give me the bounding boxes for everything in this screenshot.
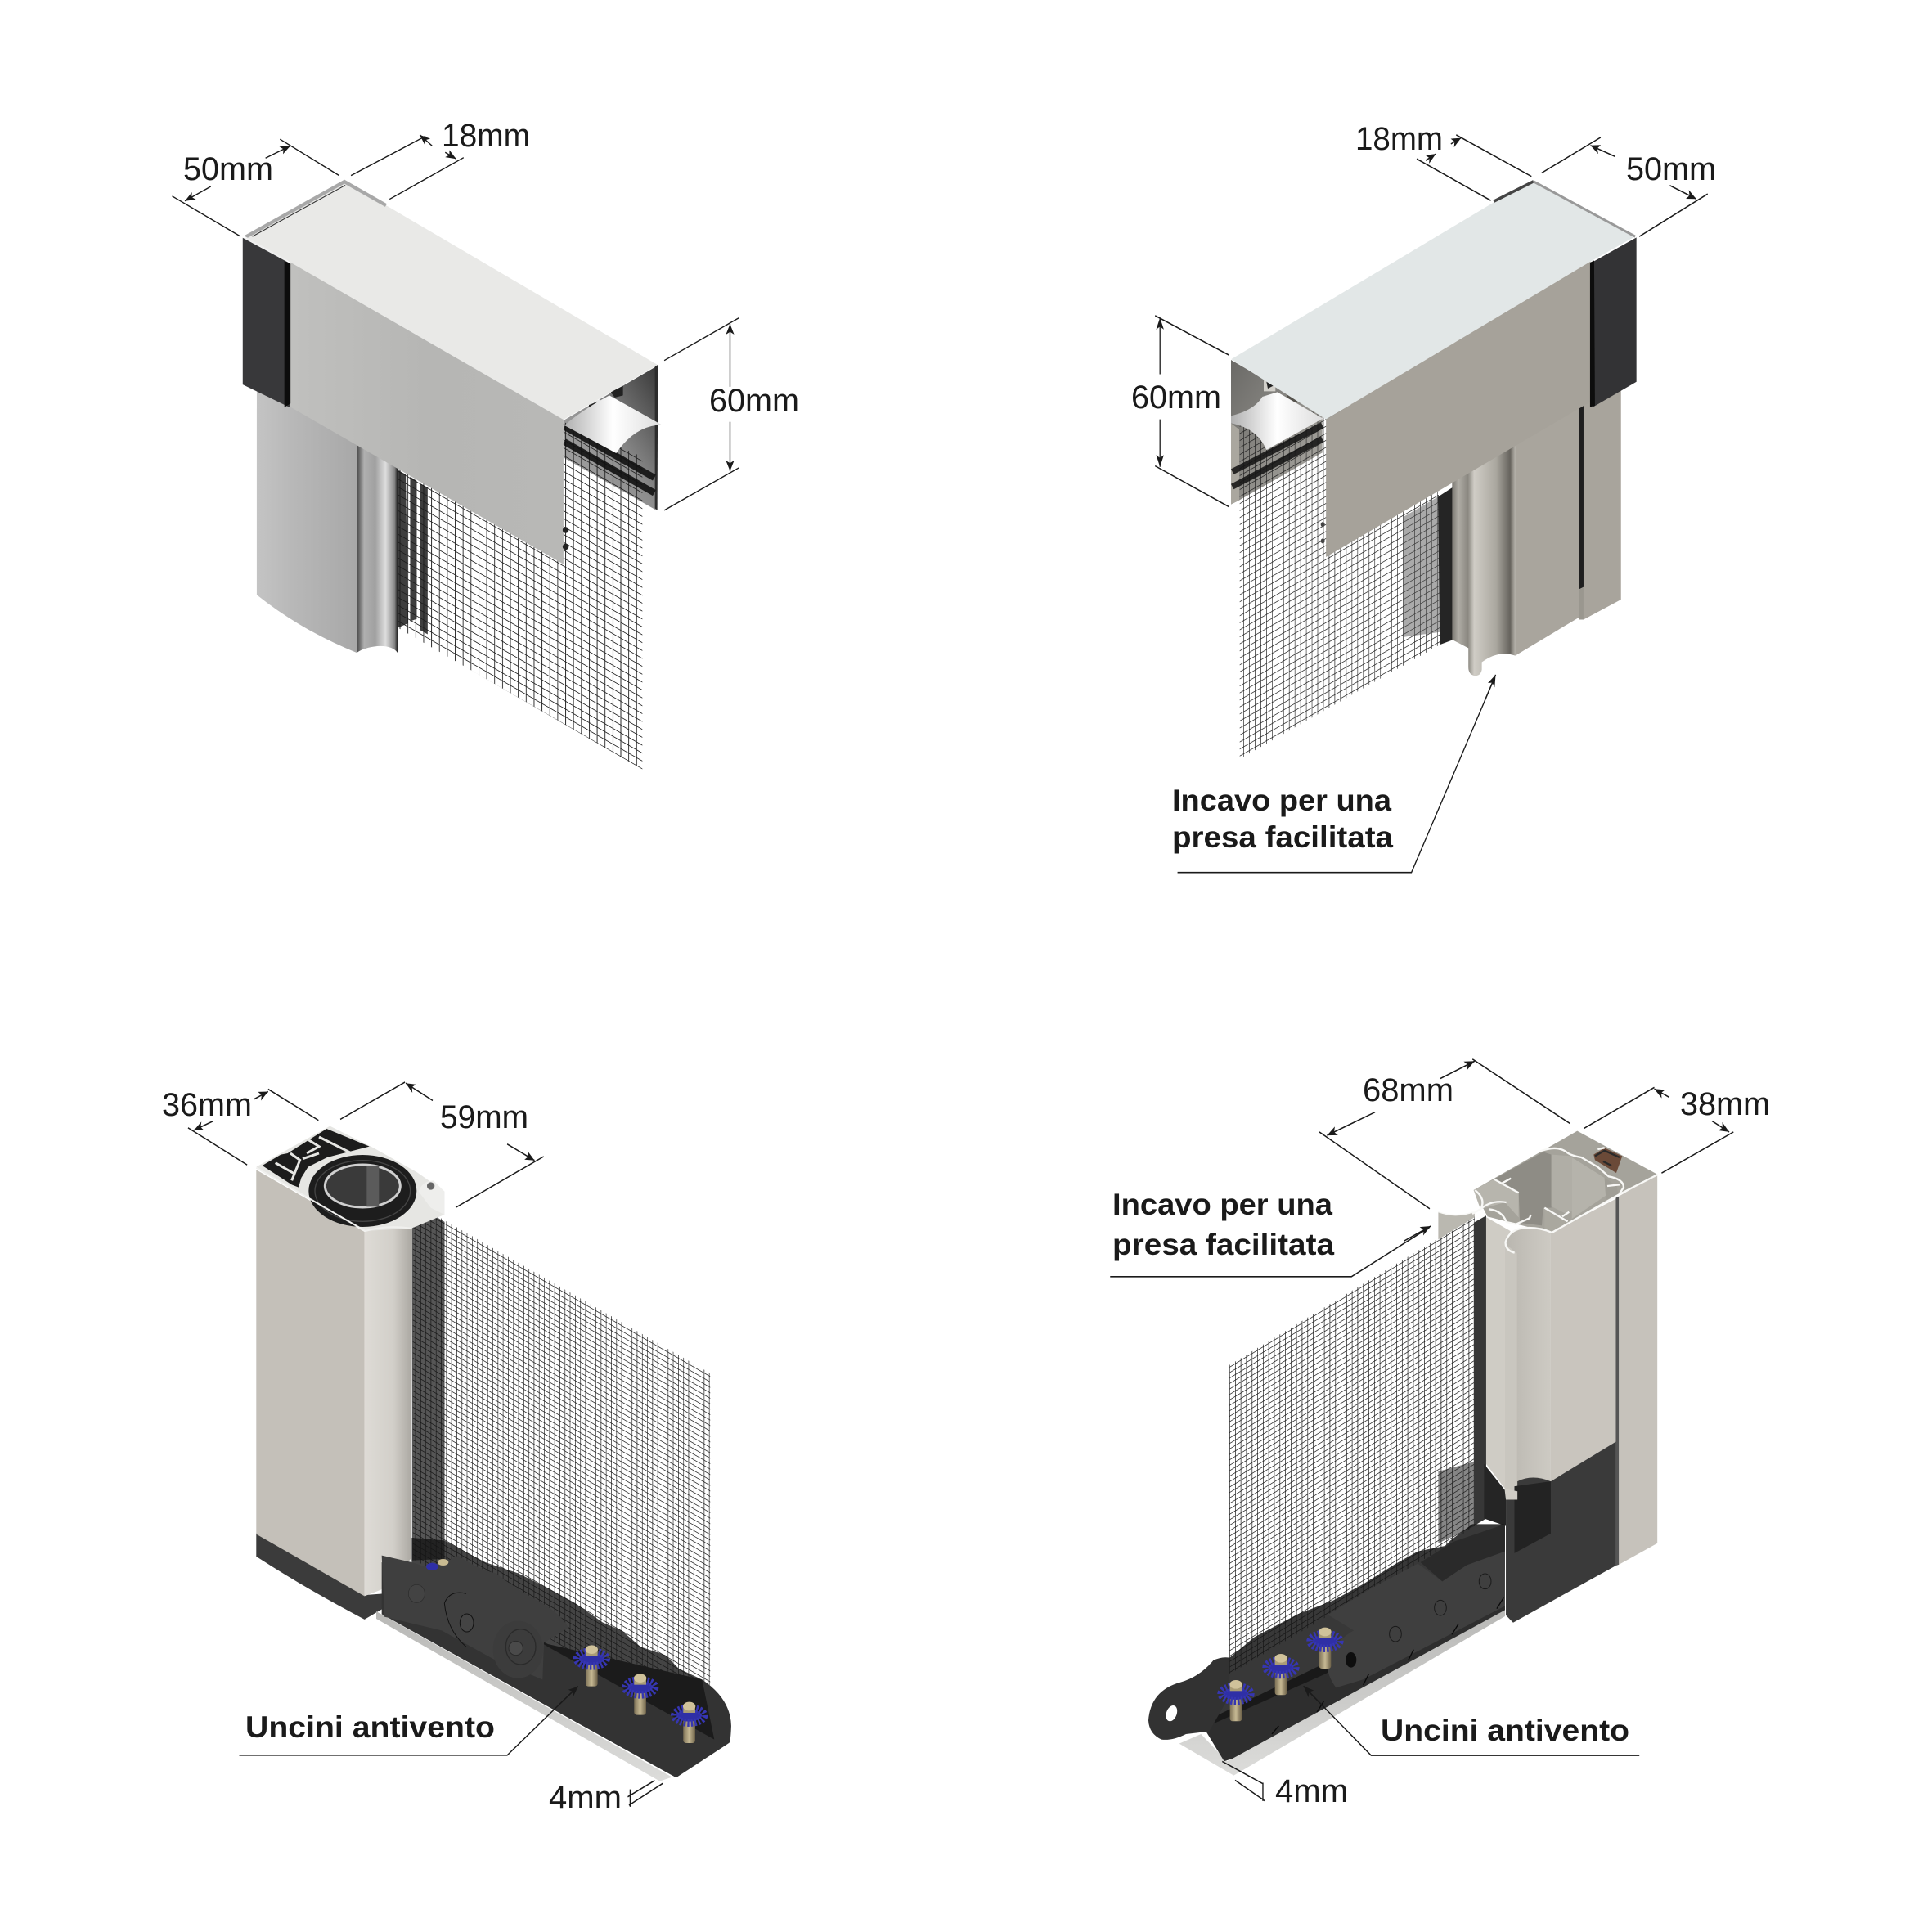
finger groove — [1452, 432, 1515, 676]
profile faces — [1486, 1174, 1657, 1566]
cassette drawing — [257, 378, 642, 770]
panel: top-right cassette profile — [1131, 121, 1716, 873]
label: 50mm: 50mm — [183, 151, 273, 187]
label: 60mm: 60mm — [1131, 380, 1221, 416]
dimension lines and leader — [188, 1082, 663, 1807]
bar drawing — [256, 1170, 710, 1732]
black channel — [1579, 399, 1584, 590]
mesh shadow — [1404, 497, 1440, 637]
cassette drawing — [1240, 377, 1621, 759]
callout: wind hooks: Uncini antivento — [245, 1710, 495, 1744]
label: 59mm: 59mm — [440, 1099, 528, 1135]
bar front face — [365, 1225, 412, 1596]
dimension lines — [173, 135, 739, 510]
base strip with end cap — [382, 1562, 731, 1777]
cover top face — [246, 182, 658, 420]
end cap — [243, 238, 290, 407]
mesh — [1229, 1216, 1475, 1674]
callout: wind hooks: Uncini antivento — [1381, 1714, 1629, 1747]
panel: bottom-right bar profile — [1110, 1059, 1770, 1809]
bar side face — [256, 1170, 365, 1596]
small hook behind chain — [426, 1559, 448, 1570]
label: 36mm: 36mm — [162, 1087, 252, 1123]
panel: top-left cassette profile — [173, 118, 799, 770]
label: 50mm: 50mm — [1626, 151, 1716, 187]
chain links — [382, 1556, 568, 1679]
label: 4mm: 4mm — [549, 1780, 622, 1816]
hook 1 — [1221, 1680, 1251, 1721]
bolts — [563, 527, 568, 533]
hook 3 — [675, 1702, 704, 1743]
dark bottom cap — [1484, 1442, 1615, 1623]
cassette cover — [1155, 135, 1708, 873]
profile section outlines — [1438, 1148, 1658, 1253]
dark mesh folds — [398, 470, 428, 635]
dark mesh band — [1202, 1524, 1505, 1728]
dark channel — [1474, 1215, 1486, 1526]
lower profile body — [257, 378, 357, 653]
rail — [376, 1611, 672, 1781]
top rim — [1494, 182, 1534, 201]
cover front face — [1326, 262, 1590, 557]
cover front face — [290, 262, 564, 564]
mesh shadow — [1438, 1462, 1475, 1543]
lower panels — [1515, 397, 1579, 656]
callout: grip recess: Incavo per una — [1112, 1188, 1332, 1221]
label: 4mm: 4mm — [1275, 1773, 1348, 1809]
callout: grip recess second line: presa facilitata — [1172, 820, 1393, 854]
top rim — [246, 182, 386, 237]
dark band — [1438, 487, 1453, 645]
rails and white sheet — [564, 386, 662, 493]
dark mesh band — [411, 1538, 714, 1740]
callout: grip recess: Incavo per una — [1172, 784, 1391, 817]
dense mesh strip — [412, 1202, 445, 1561]
interior wall of open end — [564, 365, 658, 510]
hook 2 — [1266, 1654, 1296, 1695]
hook 3 — [1310, 1628, 1340, 1669]
mesh — [1240, 387, 1440, 759]
label: 18mm: 18mm — [442, 118, 530, 154]
callout: grip recess second line: presa facilitata — [1112, 1228, 1334, 1261]
label: 60mm: 60mm — [709, 383, 799, 419]
label: 18mm: 18mm — [1355, 121, 1443, 157]
label: 68mm: 68mm — [1363, 1072, 1453, 1108]
cover top face — [1231, 182, 1635, 420]
end link — [1148, 1657, 1229, 1740]
base strip — [1201, 1606, 1505, 1761]
finger groove — [357, 433, 398, 654]
interior wall of open end — [1231, 360, 1323, 505]
chain links — [1272, 1524, 1505, 1734]
bar drawing — [1229, 1174, 1657, 1674]
panel: bottom-left bar profile — [162, 1082, 731, 1816]
chain and hooks — [376, 1538, 731, 1781]
grip panel — [1438, 1211, 1475, 1239]
label: 38mm: 38mm — [1680, 1086, 1770, 1122]
bolts — [1321, 522, 1325, 527]
dimension lines — [1155, 135, 1708, 873]
dimension lines and leaders — [1110, 1059, 1733, 1801]
mesh — [398, 422, 642, 770]
mesh — [413, 1202, 710, 1732]
cassette cover — [173, 135, 739, 564]
rail — [1179, 1609, 1505, 1776]
hook 1 — [577, 1645, 606, 1687]
end cap — [1592, 237, 1637, 407]
interior of top opening — [1474, 1131, 1658, 1233]
hook 2 — [626, 1674, 655, 1715]
chain and hooks — [1148, 1524, 1505, 1776]
rails and white sheet — [1231, 379, 1323, 487]
bar dark foot — [256, 1533, 383, 1620]
profile top section — [256, 1126, 444, 1231]
